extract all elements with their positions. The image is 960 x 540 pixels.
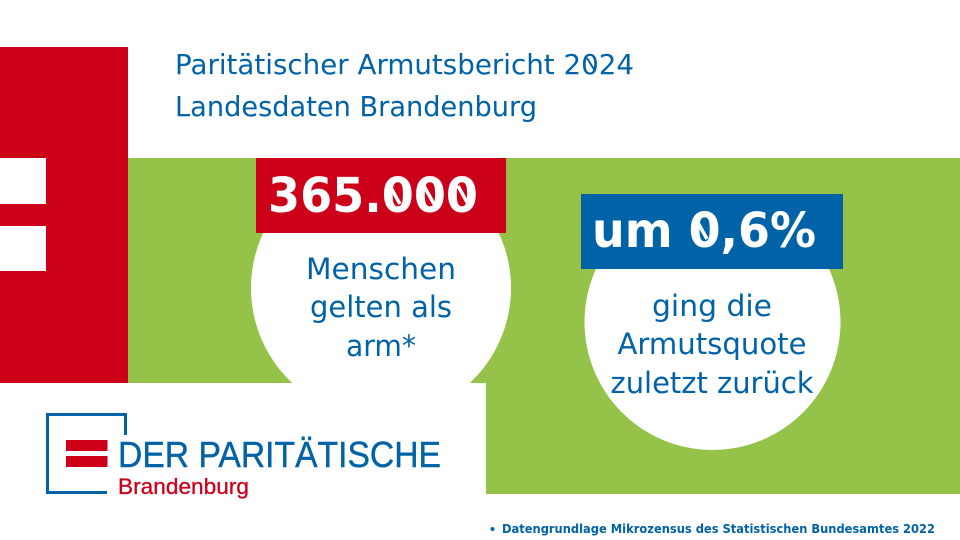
- footnote: Datengrundlage Mikrozensus des Statistischen Bundesamtes 2022: [502, 521, 935, 536]
- number: 365.000: [268, 168, 478, 224]
- value: um 0,6%: [592, 203, 816, 259]
- title: Landesdaten Brandenburg: [175, 91, 537, 123]
- panel: poverty rate decline: [581, 194, 843, 450]
- logo frame: [48, 414, 126, 492]
- logo region: Brandenburg: [118, 474, 249, 499]
- description: [306, 252, 456, 363]
- panel: poverty count: [251, 158, 511, 418]
- white circle: [584, 194, 840, 450]
- description: zuletzt zurück: [610, 366, 814, 400]
- red number box: [256, 158, 506, 233]
- description: gelten als: [310, 290, 452, 324]
- title: Paritätischer Armutsbericht 2024: [175, 49, 634, 81]
- description: [610, 289, 814, 400]
- description: Armutsquote: [618, 327, 806, 361]
- logo bars: [66, 440, 108, 467]
- red flag block: [0, 47, 128, 383]
- green background panel: [128, 158, 960, 494]
- white circle: [251, 158, 511, 418]
- logo name: DER PARITÄTISCHE: [118, 434, 441, 475]
- title: [175, 49, 634, 123]
- white area below circle: [0, 383, 486, 540]
- description: arm*: [346, 329, 416, 363]
- blue value box: [581, 194, 843, 269]
- description: Menschen: [306, 252, 456, 286]
- description: ging die: [652, 289, 772, 323]
- logo: Der Paritätische Brandenburg: [48, 414, 441, 499]
